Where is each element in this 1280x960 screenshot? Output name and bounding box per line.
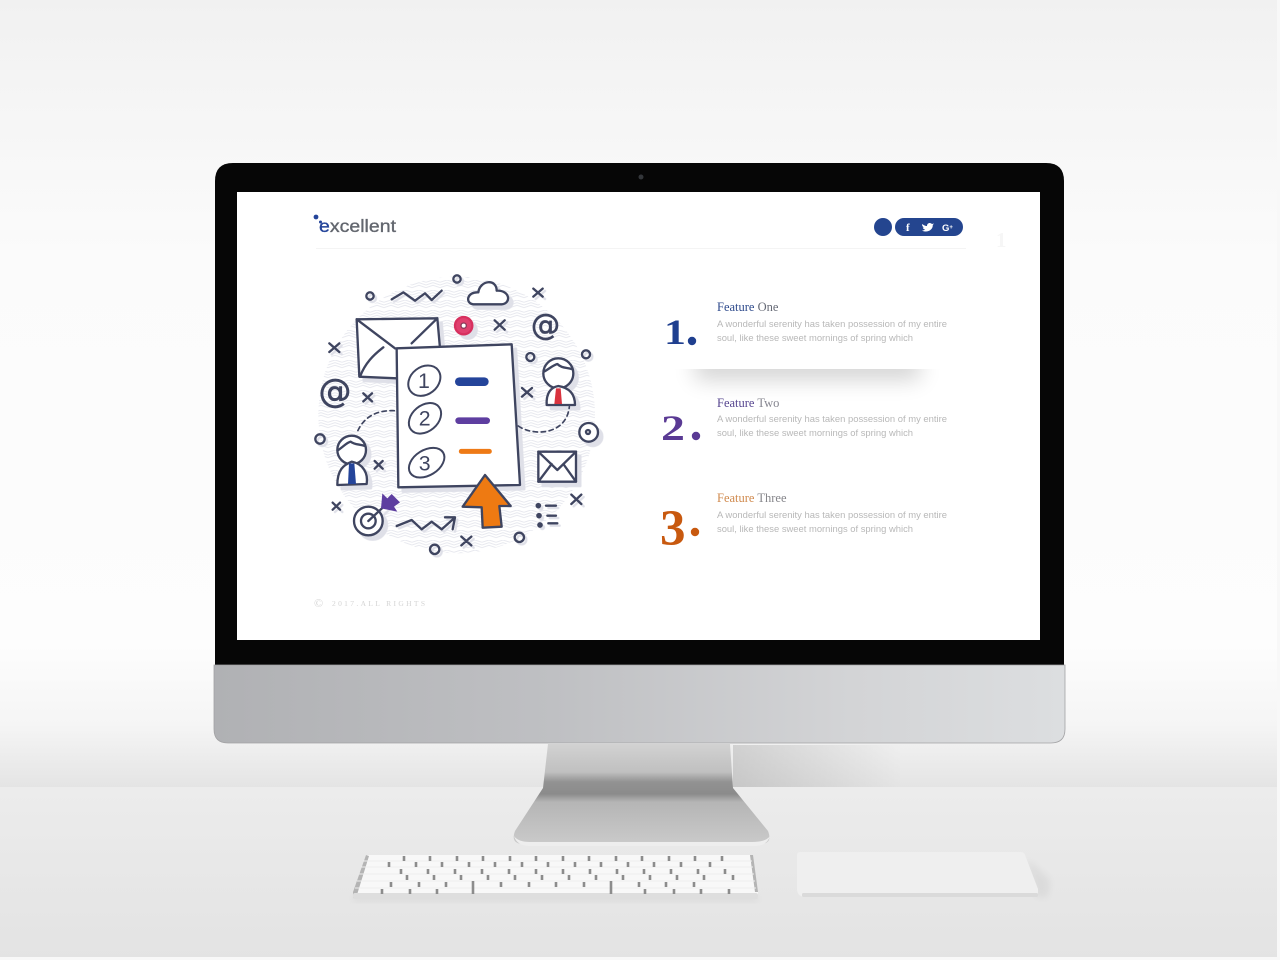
footer copyright: © bbox=[314, 596, 323, 610]
numeral one: 1 bbox=[664, 312, 686, 352]
at signs: @ bbox=[531, 308, 560, 342]
marker 3 bbox=[404, 442, 450, 484]
body one: soul, like these sweet mornings of spring which bbox=[717, 333, 913, 344]
body three: soul, like these sweet mornings of spring which bbox=[717, 524, 913, 535]
body one bbox=[717, 319, 947, 344]
small line icons bbox=[315, 275, 590, 554]
digits bbox=[418, 369, 431, 476]
body two bbox=[717, 414, 947, 439]
icon: bullseye bbox=[579, 423, 598, 442]
screen bbox=[237, 192, 1040, 640]
icon: left person bbox=[337, 436, 367, 485]
header logo: excellent bbox=[319, 216, 396, 236]
icon: cloud bbox=[468, 282, 508, 304]
icon: large envelope bbox=[357, 318, 440, 378]
digits: 3 bbox=[419, 452, 431, 476]
illustration bbox=[315, 275, 598, 554]
monitor bezel bbox=[215, 163, 1064, 665]
marker 1 bbox=[402, 359, 446, 402]
at signs bbox=[319, 308, 560, 411]
icon: arrow fletching bbox=[381, 493, 400, 512]
header divider bbox=[316, 248, 966, 249]
heading two: Feature Two bbox=[717, 396, 779, 410]
digits: 2 bbox=[419, 407, 431, 431]
monitor stand bbox=[514, 744, 770, 846]
checklist bbox=[537, 504, 557, 527]
social buttons: G bbox=[942, 223, 949, 234]
body one: A wonderful serenity has taken possession of my entire bbox=[717, 319, 947, 330]
webcam bbox=[638, 174, 644, 180]
icon: target bbox=[354, 503, 387, 535]
hatched backdrop bbox=[318, 277, 595, 553]
social buttons: + bbox=[949, 225, 953, 231]
trackpad bbox=[797, 852, 1050, 897]
numeral two: 2 bbox=[661, 409, 685, 448]
key gaps bbox=[382, 856, 733, 894]
social buttons: f bbox=[906, 222, 910, 234]
zigzag bbox=[392, 291, 442, 301]
footer copyright bbox=[314, 596, 425, 610]
card shadow bbox=[695, 352, 920, 380]
icon: pink disc bbox=[455, 317, 472, 334]
heading one: Feature One bbox=[717, 300, 779, 314]
body two: soul, like these sweet mornings of spring which bbox=[717, 428, 913, 439]
rising chart arrow bbox=[397, 517, 455, 529]
body three: A wonderful serenity has taken possession of my entire bbox=[717, 510, 947, 521]
list markers bbox=[402, 359, 450, 484]
footer copyright: 2017.ALL RIGHTS bbox=[332, 599, 425, 608]
rings bbox=[315, 275, 590, 554]
body three bbox=[717, 510, 947, 535]
page number: 1 bbox=[996, 228, 1006, 252]
body two: A wonderful serenity has taken possession of my entire bbox=[717, 414, 947, 425]
icon: right person bbox=[543, 358, 575, 405]
at signs: @ bbox=[319, 373, 351, 411]
digits: 1 bbox=[418, 369, 430, 393]
heading three: Feature Three bbox=[717, 491, 787, 505]
list bars bbox=[459, 382, 489, 451]
feature: three bbox=[660, 491, 947, 557]
icon: twitter bird bbox=[922, 223, 934, 232]
numeral three: 3 bbox=[660, 501, 686, 557]
keyboard bbox=[353, 855, 758, 901]
feature card: one bbox=[645, 280, 955, 380]
feature: two bbox=[661, 396, 947, 448]
icon: small envelope bbox=[538, 452, 576, 482]
monitor bbox=[214, 163, 1065, 743]
key rows bbox=[355, 861, 756, 888]
document bbox=[397, 344, 520, 487]
dashed connectors bbox=[357, 407, 569, 433]
marker 2 bbox=[403, 397, 447, 440]
social buttons bbox=[874, 218, 963, 236]
upload arrow bbox=[463, 475, 511, 528]
crosses bbox=[329, 289, 581, 545]
monitor chin bbox=[214, 665, 1065, 743]
